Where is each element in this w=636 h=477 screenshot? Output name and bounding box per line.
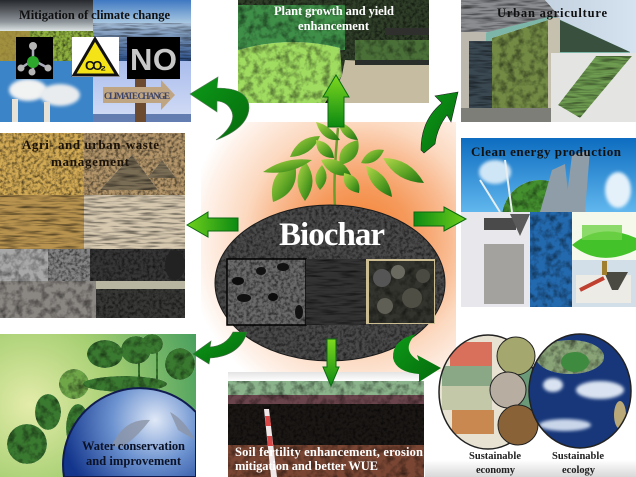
heading: agri- and urban-waste management: management: [51, 154, 130, 169]
heading: urban agriculture: Urban agriculture: [497, 6, 607, 20]
arrow: to soil fertility: [323, 339, 339, 386]
label: sustainable economy: economy: [476, 465, 516, 476]
panel: soil fertility enhancement: [228, 381, 424, 477]
icon: methane molecule: [16, 37, 53, 79]
arrow: to water conservation: [193, 332, 247, 364]
panel: plant growth and yield enhancement: [238, 0, 429, 103]
heading: water conservation and improvement: Water conservation: [82, 439, 185, 453]
panel: agri- and urban-waste management: [0, 133, 185, 318]
panel: sustainable economy and ecology: [425, 334, 636, 477]
image: charred wood: [306, 259, 366, 325]
panel: mitigation of climate change: [0, 0, 191, 122]
heading: clean energy production: Clean energy production: [471, 144, 622, 159]
arrow: to sustainable economy and ecology: [393, 334, 441, 382]
heading: mitigation of climate change: Mitigation of climate change: [19, 8, 170, 22]
image: biochar porous micrograph: [227, 259, 306, 325]
globe: sustainable ecology: [529, 334, 631, 448]
heading: soil fertility enhancement, erosion mitigation and better WUE: [235, 445, 423, 473]
label: sustainable economy: [469, 451, 521, 476]
heading: agri- and urban-waste management: Agri- and urban-waste: [22, 137, 159, 152]
icon: N2O lettering: NO: [130, 42, 177, 77]
heading: plant growth and yield enhancement: enhancement: [298, 19, 370, 33]
label: sustainable economy: Sustainable: [469, 451, 521, 462]
biochar ellipse: [215, 205, 445, 361]
heading: plant growth and yield enhancement: [274, 4, 394, 33]
heading: plant growth and yield enhancement: Plant growth and yield: [274, 4, 394, 18]
heading: water conservation and improvement: [82, 439, 185, 468]
panel: water conservation and improvement: [0, 334, 196, 477]
heading: soil fertility enhancement, erosion mitigation and better WUE: mitigation and better WUE: [235, 459, 378, 473]
arrow: to clean energy: [414, 207, 466, 231]
label: sustainable ecology: [552, 451, 604, 476]
ruler: [264, 409, 277, 477]
globe: sustainable economy: [435, 334, 540, 450]
panel: central orange background: [201, 122, 456, 381]
icon: CO2 warning sign: CO₂: [85, 58, 106, 73]
arrow: to waste management: [187, 212, 238, 237]
heading: soil fertility enhancement, erosion mitigation and better WUE: Soil fertility enhancement, erosion: [235, 445, 423, 459]
panel: urban agriculture: [461, 0, 636, 122]
panel: clean energy production: [461, 138, 636, 307]
arrow: to plant growth: [323, 75, 349, 127]
label: climate change sign: CLIMATE CHANGE: [104, 91, 170, 101]
label: sustainable ecology: Sustainable: [552, 451, 604, 462]
heading: agri- and urban-waste management: [22, 137, 159, 169]
image: biochar pellets: [366, 259, 435, 324]
icon: CO2 warning sign: [72, 37, 119, 77]
icon: seedling: [263, 122, 424, 207]
heading: water conservation and improvement: and improvement: [86, 454, 182, 468]
label: sustainable ecology: ecology: [562, 465, 596, 476]
title: biochar: Biochar: [279, 217, 385, 253]
trees around the globe: [7, 334, 195, 464]
arrow: to urban agriculture: [421, 92, 458, 153]
arrow: to mitigation of climate change: [190, 77, 249, 140]
